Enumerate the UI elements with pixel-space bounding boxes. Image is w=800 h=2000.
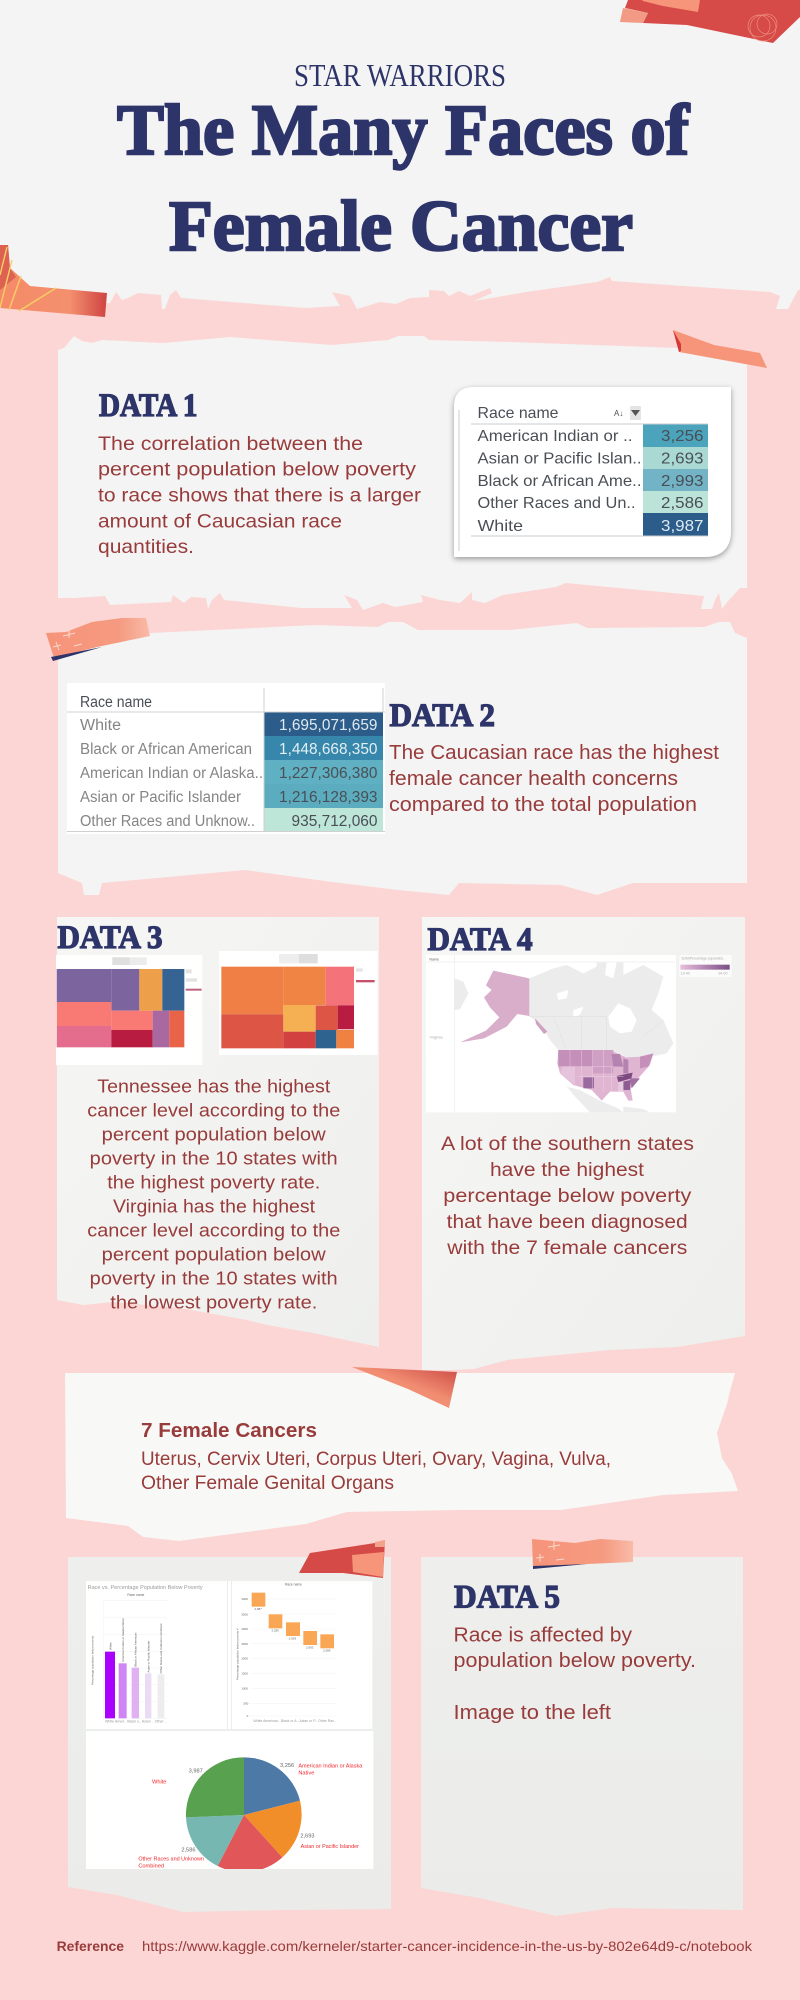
chart: orange squares: 4000 [241,1597,248,1601]
bar chart: race vs percentage: Other Races and Unknown combined [159,1623,163,1673]
heading: data 2: DATA 2 [390,698,495,734]
chart: orange squares: Race name [285,1582,302,1586]
chart: orange squares: 2000 [241,1657,248,1661]
title: Female Cancer [169,186,633,266]
tape: left [0,245,107,317]
pie chart: race share: Combined [138,1863,164,1869]
map: percent below poverty by state [426,955,732,1112]
text: data 4 description: percentage below poverty [443,1186,692,1207]
panel 4 paper [422,917,745,1370]
chart: orange squares: 3,256 [271,1629,279,1633]
heading: data 3: DATA 3 [58,920,162,956]
panel: data 4 [422,917,745,1370]
table: poverty by race: Black or African Ame.. [478,473,642,490]
table: poverty by race: Other Races and Un.. [478,495,636,512]
text: data 3 description: poverty in the 10 states with [90,1149,338,1169]
bar chart: race vs percentage: Black or African American [133,1632,137,1667]
text: data 3 description: Tennessee has the highest [97,1077,330,1097]
treemaps [56,951,378,1065]
bar chart: race vs percentage: Race vs. Percentage Population Below Poverty [88,1585,203,1591]
text: data 4 description: that have been diagnosed [447,1212,688,1233]
pie chart: race share: White [152,1779,166,1785]
bar chart: race vs percentage: White Ameri.. Black o.. Asian .. Other .. [105,1720,167,1724]
text: data 4 description [441,1134,694,1259]
table: poverty by race: American Indian or .. [478,428,632,445]
land: canada and neighbours [454,962,673,1112]
chart: orange squares: 1500 [241,1672,248,1676]
text: data 2 description [389,742,719,816]
text: data 2 description: The Caucasian race has the highest [389,742,719,764]
table: cancer counts by race: 1,448,668,350 [279,741,378,758]
tape: note [352,1367,457,1408]
table: poverty by race: 3,256 [661,428,704,445]
table: cancer counts by race: 935,712,060 [292,813,378,830]
text: data 1 description [98,433,422,558]
text: data 3 description: the highest poverty rate. [107,1173,320,1193]
table: poverty by race [454,387,731,557]
chart: orange squares: 3500 [241,1612,248,1616]
tape: top right [620,0,800,43]
tape: panel 1 [673,330,767,368]
text: data 3 description [87,1077,340,1313]
chart: orange squares: 0 [247,1714,249,1718]
chart: orange squares: White American.. Black or A.. Asian or P.. Other Rac.. [253,1719,336,1723]
text: data 3 description: cancer level according to the [87,1101,340,1121]
pie chart: race share: 3,987 [189,1769,203,1775]
text: data 1 description: percent population below poverty [98,458,416,480]
text: data 5 description: Race is affected by [454,1624,632,1646]
text: data 1 description: The correlation between the [98,433,363,455]
chart: orange squares: 2,993 [289,1636,296,1640]
pie chart: race share: 2,586 [181,1848,195,1854]
bar chart: race vs percentage: White [108,1642,112,1650]
panel 3 paper [57,917,379,1347]
bar chart: race vs percentage [88,1585,203,1724]
text: data 4 description: A lot of the southern states [441,1134,694,1155]
panel: data 5 charts [68,1540,391,1912]
text: data 3 description: cancer level according to the [87,1221,340,1241]
region: british columbia strip [535,1018,547,1034]
pie chart: race share: Asian or Pacific Islander [301,1844,359,1850]
table: cancer counts by race: 1,216,128,393 [279,789,378,806]
pie chart: race share [86,1731,373,1872]
tape: data 5 [532,1539,633,1569]
table: poverty by race: White [478,518,523,535]
table: cancer counts by race: White [80,717,121,734]
table: poverty by race: 2,993 [661,473,704,490]
chart: orange squares: 1000 [241,1687,248,1691]
legend: colour scale: 94.00 [718,971,727,975]
bar chart: race vs percentage: Race name [127,1593,145,1597]
bar chart: race vs percentage: Asian or Pacific Islander [146,1641,150,1673]
panel: data 1 [58,330,767,610]
heading: 7 female cancers: 7 Female Cancers [141,1420,317,1442]
charts [86,1581,373,1872]
chart: orange squares [235,1582,336,1723]
heading: data 5: DATA 5 [454,1580,560,1616]
map: contiguous states [557,1050,653,1101]
text: cancer list [141,1449,611,1494]
pie chart: race share: 3,256 [280,1763,294,1769]
text: data 2 description: female cancer health concerns [389,768,678,790]
text: cancer list: Uterus, Cervix Uteri, Corpus Uteri, Ovary, Vagina, Vulva, [141,1449,611,1470]
chart: orange squares: 3,987 [254,1607,262,1611]
panel: data 2 [46,618,747,895]
table: poverty by race: Race name [478,405,559,422]
pie chart: race share: Native [298,1770,314,1776]
title: The Many Faces of [117,90,690,170]
text: data 4 description: have the highest [490,1160,645,1181]
legend: colour scale [680,956,730,975]
table: cancer counts by race [67,683,385,834]
text: data 3 description: poverty in the 10 states with [90,1269,338,1289]
table: cancer counts by race: 1,695,071,659 [279,717,378,734]
chart: orange squares: 2,586 [323,1649,331,1653]
text: data 1 description: amount of Caucasian race [98,510,342,532]
heading: organisation: STAR WARRIORS [294,57,506,93]
text: data 1 description: quantities. [98,536,194,558]
table: cancer counts by race: Asian or Pacific Islander [80,789,241,806]
table: poverty by race: 3,987 [661,518,704,535]
text: data 3 description: percent population below [102,1125,327,1145]
header torn paper [0,0,800,309]
state: alaska [460,971,529,1042]
table: cancer counts by race: Other Races and Unknow.. [80,813,255,830]
table: poverty by race: Asian or Pacific Islan.. [478,450,642,468]
treemap: lowest poverty states [219,951,378,1055]
text: data 4 description: with the 7 female cancers [446,1238,687,1259]
table: cancer counts by race: American Indian or Alaska.. [80,765,263,782]
heading: data 1: DATA 1 [99,388,198,424]
text: data 1 description: to race shows that there is a larger [98,484,422,506]
panel 1 paper [58,336,747,610]
map: percent below poverty by state: Name [429,958,439,962]
table: poverty by race: 2,586 [661,495,704,512]
panel: 7 female cancers [65,1367,738,1541]
chart: orange squares: 2500 [241,1642,248,1646]
reference line: https://www.kaggle.com/kerneler/starter-cancer-incidence-in-the-us-by-802e64d9-c/notebook [142,1938,753,1954]
title [117,90,690,266]
tape: panel 2 [46,618,150,661]
text: data 3 description: the lowest poverty rate. [110,1293,317,1313]
text: data 5 description: Image to the left [454,1702,611,1724]
reference line: Reference [57,1938,124,1954]
pie chart: race share: American Indian or Alaska [298,1764,363,1770]
heading: data 4: DATA 4 [428,922,532,958]
pie chart: race share: Other Races and Unknown [138,1857,204,1863]
bar chart: race vs percentage: Percentage population below poverty [90,1635,94,1685]
panel: data 5 text [421,1539,743,1916]
panel 5 right paper [421,1557,743,1916]
chart: orange squares: 500 [243,1701,249,1705]
table: cancer counts by race: 1,227,306,380 [279,765,378,782]
text: data 5 description [454,1624,696,1724]
panel 2 paper [58,622,747,895]
torn note paper [65,1373,738,1541]
text: cancer list: Other Female Genital Organs [141,1473,394,1494]
map: percent below poverty by state: Virginia [429,1035,443,1040]
tape: charts [299,1540,385,1578]
treemap: highest poverty states [56,955,202,1065]
chart: orange squares: 2,693 [306,1645,314,1649]
chart: orange squares: 3000 [241,1627,248,1631]
legend: colour scale: SUM(Percentage population.. [681,956,725,960]
table: poverty by race: 2,693 [661,450,704,468]
text: data 2 description: compared to the total population [389,794,697,816]
text: data 3 description: percent population below [102,1245,327,1265]
chart: orange squares: Percentage population below poverty # [235,1628,239,1680]
bar chart: race vs percentage: American Indian or Alaska Native [121,1618,125,1662]
table: poverty by race: A↓ [614,409,623,418]
table: cancer counts by race: Race name [80,694,152,711]
pie chart: race share: 2,693 [300,1833,314,1839]
text: data 3 description: Virginia has the highest [113,1197,315,1217]
table: cancer counts by race: Black or African American [80,741,252,758]
panel 5 left paper [68,1557,391,1912]
panel: data 3 [56,917,379,1347]
text: data 5 description: population below poverty. [454,1650,696,1672]
legend: colour scale: 19.40 [681,971,690,975]
